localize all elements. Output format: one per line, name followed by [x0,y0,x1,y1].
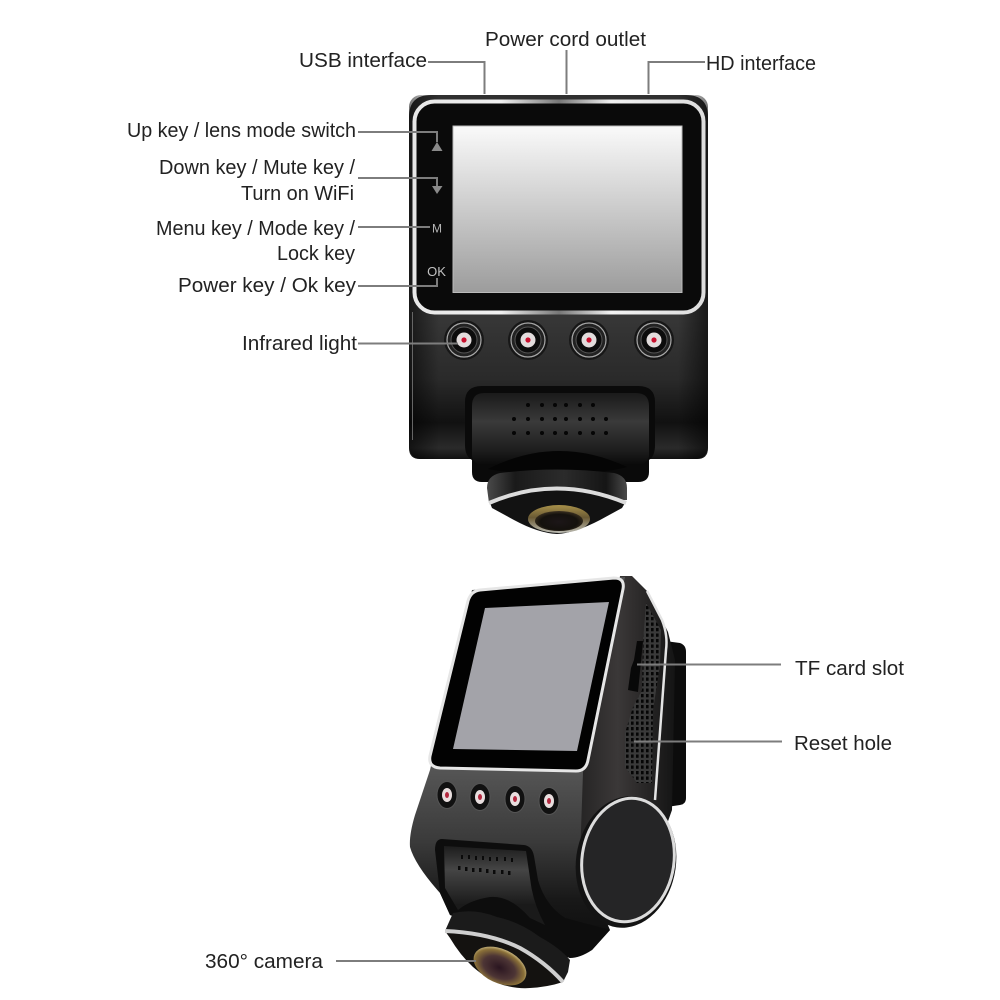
silver side trim [647,591,666,800]
callout: Power key: Power key / Ok key [178,274,357,297]
camera body [409,95,708,459]
callout: USB interface: USB interface [299,49,427,72]
callout: Infrared light: Infrared light [242,332,357,355]
side vent upper [633,603,661,710]
angled view dash camera [410,576,686,993]
button icon: down [432,186,442,194]
silver screen bezel [414,102,704,312]
callout: Reset hole: Reset hole [794,732,892,755]
button icon: up [432,142,442,151]
front body [410,577,625,958]
360 lens [487,470,627,534]
360 lens [445,911,570,993]
button label: M: M [432,222,442,236]
screen [453,126,682,292]
side vent lower [625,707,653,783]
rear mount plate [660,641,686,808]
side panel [560,576,675,900]
callout: Up key: Up key / lens mode switch [127,119,356,142]
round side cap [567,790,685,934]
screen bezel [430,578,623,771]
infrared lights [444,320,674,360]
callout: Power cord outlet: Power cord outlet [485,28,646,51]
callout: 360 camera: 360° camera [205,950,324,973]
callout: USB interface [299,49,484,94]
callout: Down key: Turn on WiFi [241,182,354,205]
button label: OK: OK [427,264,446,279]
callout: Down key [159,156,437,205]
bracket [435,839,610,958]
screen [453,602,609,751]
callout: Power key [178,274,437,297]
speaker holes [512,403,608,435]
callout: Down key: Down key / Mute key / [159,156,355,179]
callout: Menu key [156,217,430,265]
callout: Menu key: Lock key [277,242,356,265]
infrared lights [437,782,559,814]
callout: Menu key: Menu key / Mode key / [156,217,355,240]
callout: HD interface [648,52,816,94]
bracket shadow arc [488,451,627,474]
top view dash camera [409,95,708,534]
callout: HD interface: HD interface [706,52,816,75]
callout: TF card slot: TF card slot [795,657,904,680]
tf card slot [628,641,643,692]
lens bracket [465,386,655,482]
bracket speaker holes [458,855,513,875]
